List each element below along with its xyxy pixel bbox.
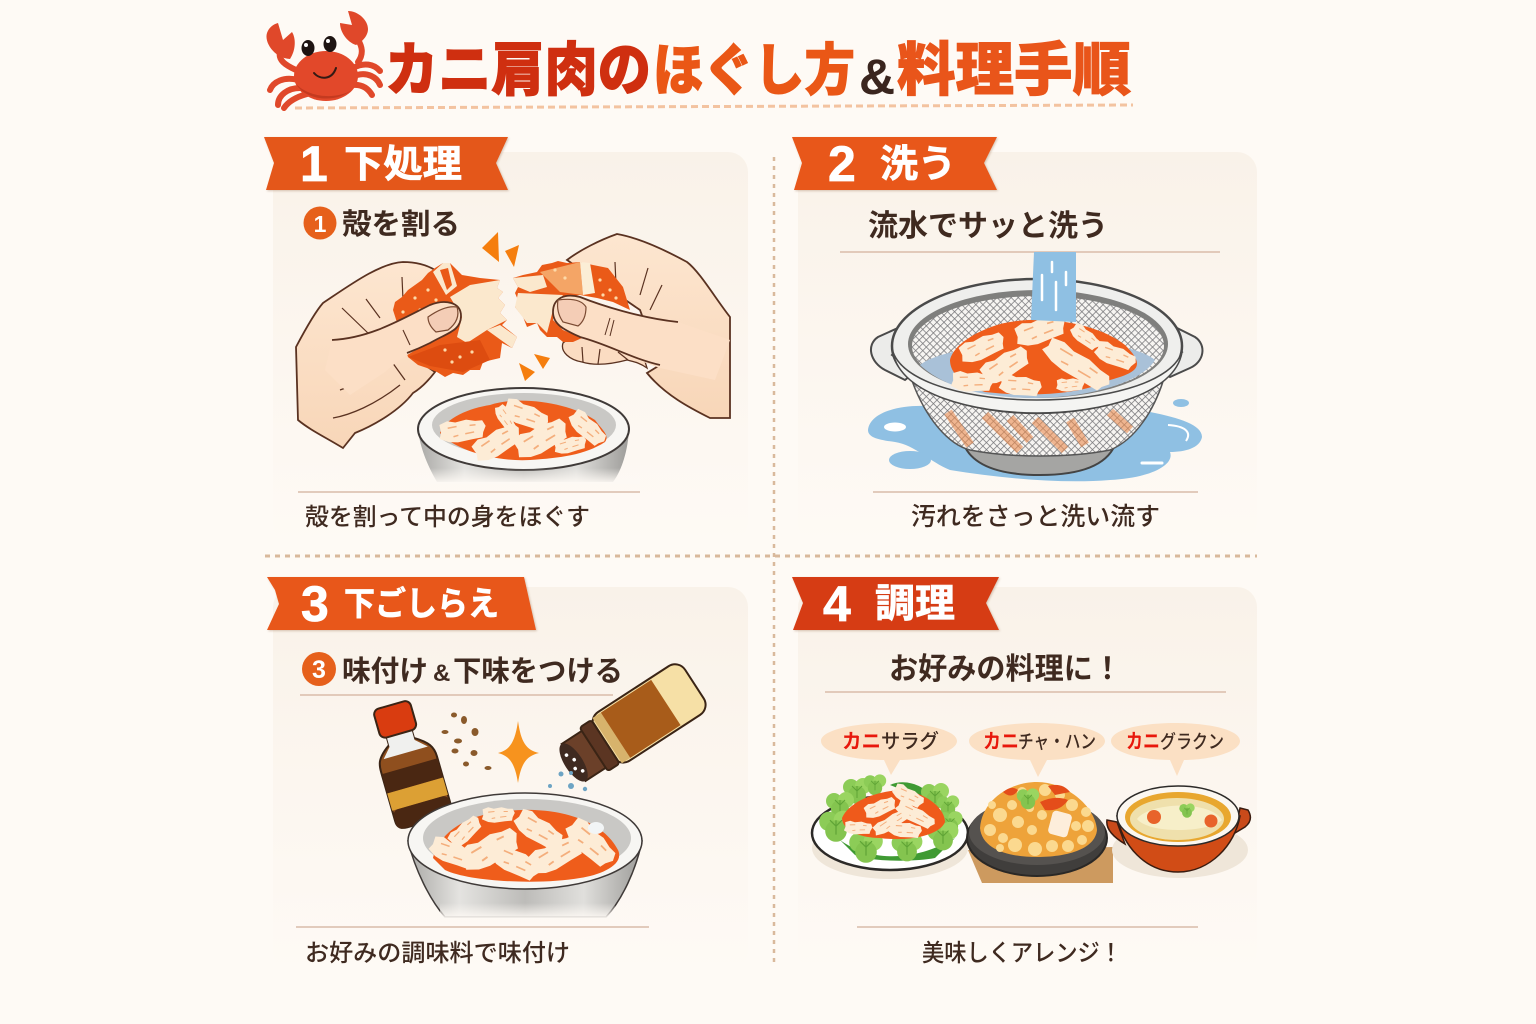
callout: カニサラグ: [821, 723, 957, 775]
ribbon heading: step 2 洗う: [792, 133, 997, 192]
rim front highlight: [893, 352, 1182, 413]
sub-heading: 味付け&下味をつける: &: [433, 660, 450, 687]
ribbon heading: step 4 調理: 4: [823, 576, 851, 632]
title: [385, 23, 1131, 107]
illustration: seasoned crab meat bowl: [408, 793, 642, 919]
ribbon heading: step 2 洗う: 2: [828, 136, 856, 192]
ribbon heading: step 2 洗う: 洗う: [880, 133, 956, 188]
illustration: hands cracking crab shell: [296, 232, 730, 448]
callout: カニチャ・ハン: カニ: [983, 725, 1019, 754]
title: 料理手順: [897, 23, 1131, 107]
water stream: [1031, 252, 1076, 322]
callout: カニグラクン: グラクン: [1160, 727, 1224, 754]
divider and caption: step 1: 殻を割って中の身をほぐす: [305, 497, 590, 532]
ribbon heading: step 3 下ごしらえ: [267, 576, 536, 632]
panel background: step 1: [273, 152, 748, 544]
right thumb: [553, 296, 730, 380]
ribbon heading: step 4 調理: [792, 573, 999, 632]
icon: crab mascot: [266, 11, 380, 108]
divider and caption: step 4: 美味しくアレンジ！: [922, 933, 1122, 968]
illustration: pepper shaker: [550, 660, 710, 792]
callout: カニサラグ: サラグ: [881, 725, 939, 754]
callout: カニグラクン: カニ: [1126, 725, 1160, 754]
panel background: step 3: [273, 587, 748, 972]
left hand: [296, 262, 435, 448]
illustration: crab salad plate: [812, 774, 968, 879]
sub-heading: 殻を割る: 1: [314, 211, 327, 237]
illustration: colander with crab meat under running water: [871, 252, 1202, 475]
divider and caption: step 2: 汚れをさっと洗い流す: [911, 497, 1160, 533]
panel background: step 2: [798, 152, 1257, 544]
rim: [892, 279, 1182, 413]
sub-heading: お好みの料理に！: お好みの料理に！: [889, 644, 1122, 688]
icon: sparkle: [498, 721, 539, 783]
callout: カニサラグ: カニ: [842, 725, 881, 754]
callout: カニグラクン: [1111, 723, 1240, 776]
sub-heading: 味付け&下味をつける: 味付け: [342, 648, 428, 690]
title: ほぐし方: [653, 26, 855, 107]
ribbon heading: step 3 下ごしらえ: 3: [301, 576, 329, 632]
sub-heading: 味付け&下味をつける: 3: [312, 656, 326, 684]
left shell: [393, 263, 517, 377]
ribbon heading: step 4 調理: 調理: [875, 573, 955, 629]
illustration: crab fried rice on hot plate: [967, 782, 1113, 883]
panel background: step 4: [798, 587, 1257, 972]
ribbon heading: step 1 下処理: 下処理: [344, 133, 462, 188]
mesh body: [910, 375, 1165, 456]
illustration: crab gratin dish: [1107, 786, 1250, 878]
ribbon heading: step 3 下ごしらえ: 下ごしらえ: [344, 577, 499, 625]
sub-heading: 味付け&下味をつける: [300, 648, 623, 695]
crab meat: [950, 320, 1137, 394]
ribbon heading: step 1 下処理: [264, 133, 508, 192]
illustration: soy sauce bottle: [364, 697, 453, 830]
right shell: [513, 261, 630, 342]
illustration: water puddle: [868, 399, 1202, 481]
handles: [871, 327, 915, 380]
right hand: [567, 234, 730, 418]
sub-heading: 殻を割る: 殻を割る: [342, 201, 460, 243]
illustration: bowl of crab meat: [410, 388, 640, 484]
icon: falling spices and salt: [442, 712, 587, 814]
sub-heading: 味付け&下味をつける: 下味をつける: [453, 648, 623, 690]
title: カニ肩肉の: [385, 23, 651, 107]
callout: カニチャ・ハン: チャ・ハン: [1018, 727, 1096, 754]
base: [964, 445, 1115, 475]
title: &: [859, 49, 895, 105]
divider and caption: step 3: お好みの調味料で味付け: [305, 933, 570, 968]
left thumb: [325, 302, 461, 395]
ribbon heading: step 1 下処理: 1: [300, 136, 328, 192]
icon: crack sparks: [482, 232, 550, 381]
callout: カニチャ・ハン: [969, 723, 1105, 777]
sub-heading: 流水でサッと洗う: 流水でサッと洗う: [868, 201, 1108, 245]
